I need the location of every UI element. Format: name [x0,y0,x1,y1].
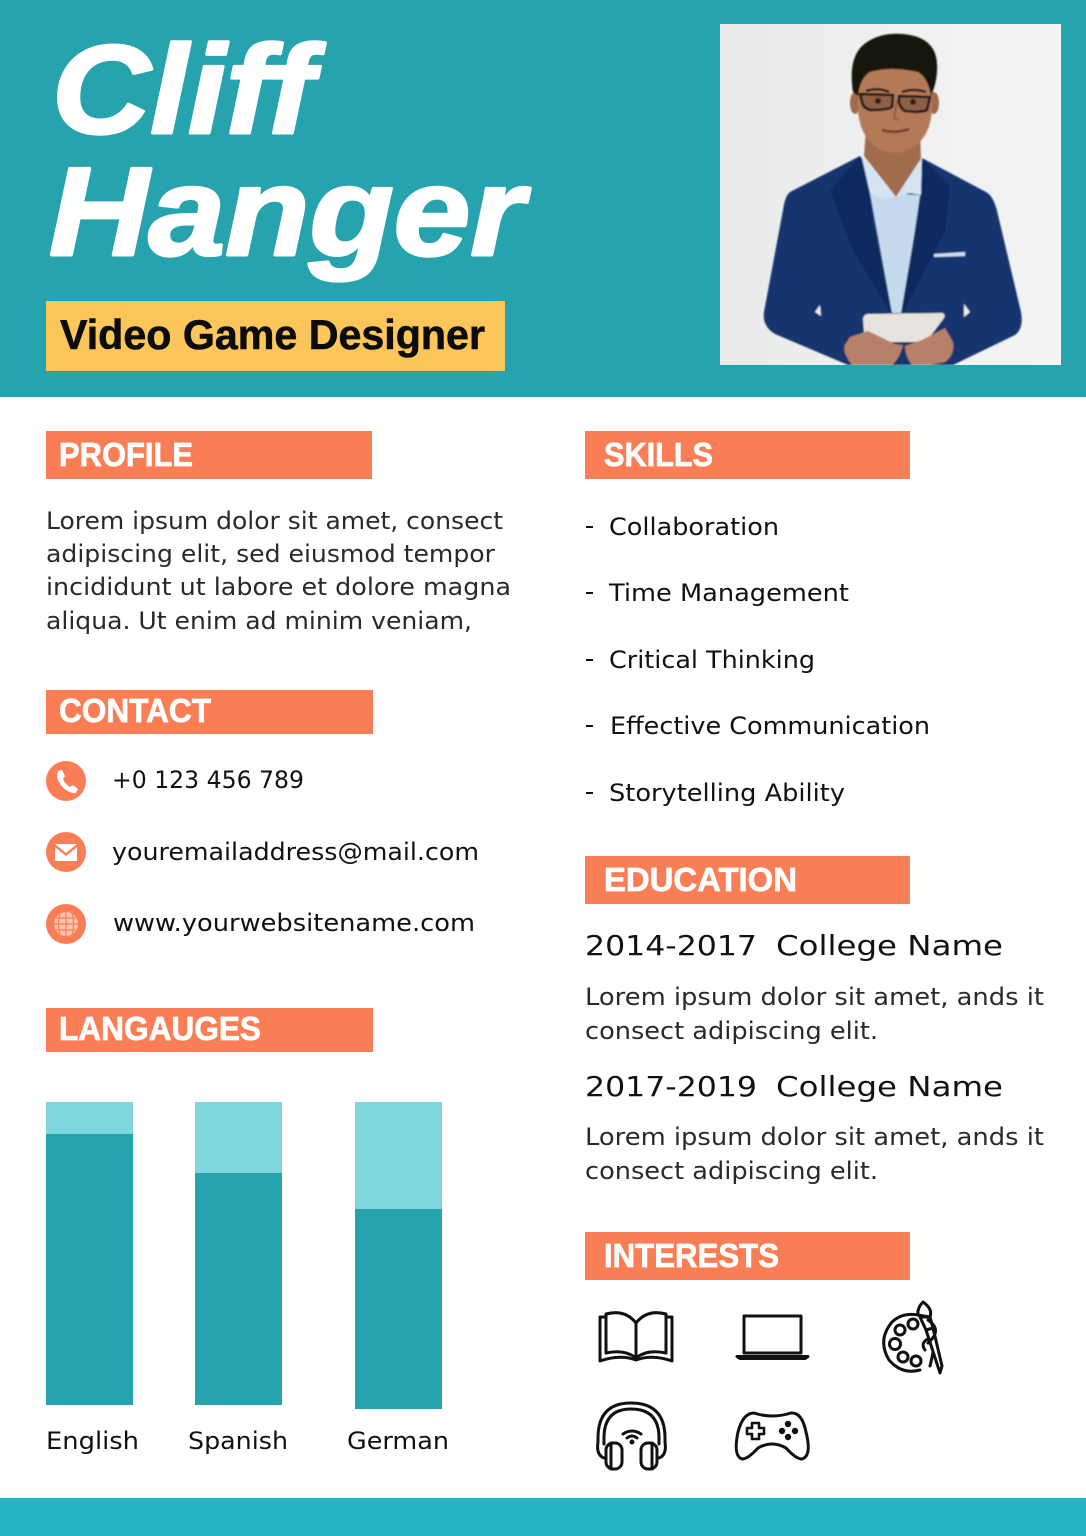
bar: English [46,1102,133,1405]
contact: website: www.yourwebsitename.com [113,909,475,937]
profile text [46,507,511,635]
profile text: incididunt ut labore et dolore magna [46,573,511,601]
education entry 1: Lorem ipsum dolor sit amet, ands it [585,983,1044,1011]
shirt collar [861,154,922,198]
header band [0,0,1086,397]
heading: interests: INTERESTS [604,1237,779,1274]
gaps between arms and torso [815,304,970,317]
ears [850,92,860,114]
education entry 1: College Name [776,929,1003,962]
contact: email: youremailaddress@mail.com [112,838,479,866]
education entry 2: Lorem ipsum dolor sit amet, ands it [585,1123,1044,1151]
heading: contact: CONTACT [59,692,211,729]
heading: skills [585,431,910,479]
education entry 2: consect adipiscing elit. [585,1157,878,1185]
glasses [860,94,930,112]
panel: interests [585,1232,942,1469]
education entry 2: College Name [776,1070,1003,1103]
bar: German [355,1102,442,1409]
portrait photo [720,24,1061,365]
panel: languages [46,1008,449,1455]
heading: profile: PROFILE [59,436,193,473]
education entry 1 [585,929,1044,1045]
skill: critical thinking: Critical Thinking [609,646,815,674]
heading: education [585,856,910,904]
profile text: adipiscing elit, sed eiusmod tempor [46,540,495,568]
neck [864,130,921,197]
icon: headphones [598,1403,665,1469]
skill: time management: Time Management [608,579,849,607]
profile text: Lorem ipsum dolor sit amet, consect [46,507,503,535]
panel: skills [585,431,930,807]
label: German: German [347,1427,449,1455]
icon: phone [46,761,86,801]
hands [844,328,953,365]
education entry 1: consect adipiscing elit. [585,1017,878,1045]
heading: interests [585,1232,910,1280]
name: first line: Cliff [52,19,326,160]
icon: game controller [736,1413,808,1459]
eyebrows, eyes and nose [866,89,926,92]
heading: education: EDUCATION [604,861,797,898]
icon: book [600,1313,672,1361]
heading: skills: SKILLS [604,436,713,473]
skill: collaboration: Collaboration [609,513,779,541]
profile text: aliqua. Ut enim ad minim veniam, [46,607,472,635]
label: English: English [46,1427,139,1455]
heading: contact [46,690,373,734]
hair [852,34,937,96]
pocket square [934,252,965,257]
lapels [830,156,950,313]
name: second line: Hanger [49,141,531,282]
icon: palette and brush [884,1302,942,1373]
heading: profile [46,431,372,479]
bar chart [46,1102,449,1455]
job title badge: Video Game Designer [60,311,485,358]
education entry 2 [585,1070,1044,1185]
contact: phone number: +0 123 456 789 [112,766,304,794]
mouth [882,129,909,132]
education entry 2: 2017-2019 [585,1070,757,1103]
heading: languages [46,1008,373,1052]
skill: effective communication: Effective Communication [610,712,930,740]
bar: Spanish [195,1102,282,1405]
icon: globe [46,904,86,944]
jacket [764,156,1022,365]
heading: languages: LANGAUGES [59,1010,261,1047]
label: Spanish: Spanish [188,1427,288,1455]
job title badge [46,301,505,371]
face [858,66,932,152]
footer band [0,1498,1086,1536]
icon: email [46,832,86,872]
panel: profile [46,431,511,635]
education entry 1: 2014-2017 [585,929,757,962]
tablet [863,313,945,342]
skill: storytelling ability: Storytelling Ability [609,779,845,807]
panel: education [585,856,1044,1185]
icon: laptop [737,1316,808,1358]
shirt [870,193,920,313]
panel: contact [46,690,479,944]
